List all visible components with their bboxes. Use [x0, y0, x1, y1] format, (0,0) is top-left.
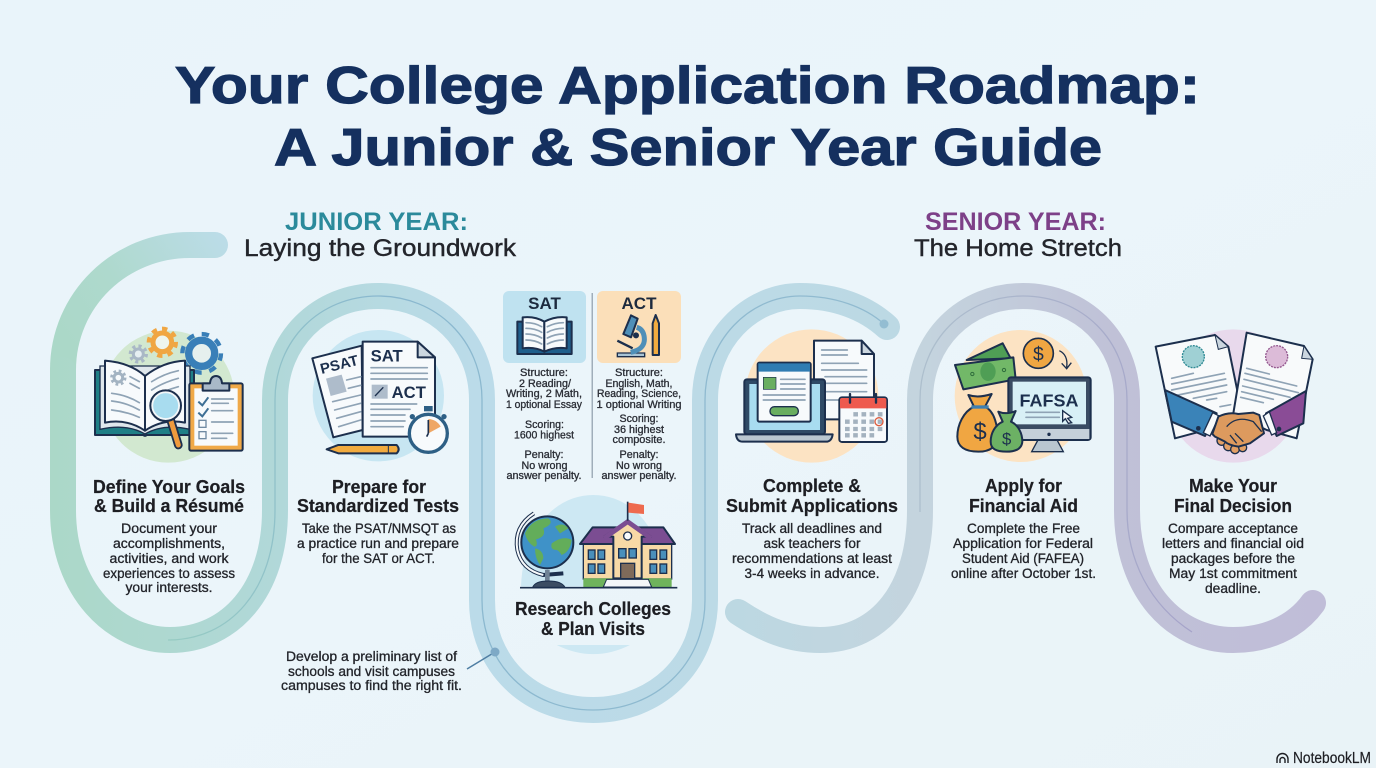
heading: complete and submit: Submit Applications: [726, 496, 898, 516]
text: complete body: [732, 521, 892, 581]
text: SAT facts: Penalty:: [524, 449, 564, 461]
icon: test papers, stopwatch and pencil: PSAT: [319, 353, 360, 378]
roadmap path: junior year: [63, 245, 888, 710]
icon: money, FAFSA monitor and bags: $: [973, 418, 987, 445]
text: ACT facts: Structure:: [615, 367, 663, 379]
heading: research colleges: [515, 599, 671, 639]
text: prepare body: a practice run and prepare: [297, 536, 459, 551]
text: final decision body: deadline.: [1205, 581, 1261, 596]
heading: apply for aid: [969, 476, 1078, 516]
text: SAT facts: Writing, 2 Math,: [506, 388, 582, 400]
text: ACT facts: answer penalty.: [602, 470, 676, 482]
callout: develop a preliminary list: campuses to find the right fit.: [281, 678, 462, 693]
text: final decision body: packages before the: [1171, 551, 1295, 566]
heading: complete and submit: [726, 476, 898, 516]
icon: acceptance letters and handshake: [1156, 329, 1313, 463]
text: SAT facts: No wrong: [522, 460, 568, 472]
icon: laptop, document and calendar: [736, 329, 887, 463]
card: SAT: SAT: [528, 294, 561, 313]
icon: money, FAFSA monitor and bags: FAFSA: [1019, 391, 1079, 411]
divider: [592, 293, 593, 478]
text: prepare body: [297, 521, 459, 566]
text: define goals body: experiences to assess: [103, 566, 235, 581]
callout: develop a preliminary list: [281, 648, 500, 693]
text: financial aid body: online after October 1st.: [951, 566, 1096, 581]
panel: financial aid: [951, 330, 1096, 581]
panel: final decision: [1156, 329, 1313, 596]
text: SAT facts: Structure:: [520, 367, 568, 379]
title: [175, 57, 1200, 177]
card: ACT: [597, 291, 681, 363]
text: define goals body: your interests.: [126, 580, 212, 595]
text: define goals body: activities, and work: [110, 551, 229, 566]
text: final decision body: Compare acceptance: [1168, 521, 1298, 536]
callout: develop a preliminary list: Develop a preliminary list of: [286, 649, 457, 664]
text: ACT facts: No wrong: [616, 460, 662, 472]
heading: complete and submit: Complete &: [763, 476, 861, 496]
roadmap path: senior year: [738, 296, 1313, 640]
heading: apply for aid: Apply for: [985, 476, 1062, 496]
text: final decision body: letters and financial oid: [1162, 536, 1304, 551]
card: ACT: ACT: [622, 294, 657, 313]
text: define goals body: [103, 521, 235, 595]
title: A Junior & Senior Year Guide: [274, 119, 1102, 177]
callout: develop a preliminary list: schools and visit campuses: [288, 664, 455, 679]
icon: test papers, stopwatch and pencil: ACT: [392, 383, 426, 402]
text: ACT facts: Penalty:: [620, 449, 658, 461]
panel: standardized tests: [297, 330, 459, 566]
icon: book, gears, magnifier and checklist: [95, 329, 243, 463]
heading: define your goals: & Build a Résumé: [94, 496, 244, 516]
card: SAT: [503, 291, 586, 363]
panel: research colleges: [515, 495, 677, 654]
text: SAT facts: 2 Reading/: [519, 378, 572, 390]
heading: junior year: Laying the Groundwork: [244, 235, 517, 262]
text: complete body: ask teachers for: [764, 536, 861, 551]
text: financial aid body: [951, 521, 1096, 581]
text: prepare body: for the SAT or ACT.: [322, 551, 435, 566]
icon: test papers, stopwatch and pencil: [312, 330, 447, 461]
text: final decision body: May 1st commitment: [1169, 566, 1297, 581]
panel: define goals: [93, 329, 245, 595]
icon: money, FAFSA monitor and bags: [955, 330, 1091, 462]
heading: research colleges: & Plan Visits: [541, 619, 645, 639]
text: financial aid body: Complete the Free: [967, 521, 1080, 536]
text: ACT facts: 1 optional Writing: [596, 399, 682, 411]
text: ACT facts: [596, 367, 682, 482]
panel: complete applications: [726, 329, 898, 581]
text: SAT facts: Scoring:: [525, 419, 564, 431]
text: final decision body: [1162, 521, 1304, 596]
text: SAT facts: 1 optional Essay: [506, 399, 582, 411]
text: ACT facts: composite.: [612, 434, 666, 446]
text: ACT facts: 36 highest: [614, 424, 665, 436]
icon: money, FAFSA monitor and bags: $: [1033, 344, 1044, 365]
heading: define your goals: [93, 477, 245, 516]
text: ACT facts: Scoring:: [620, 413, 658, 425]
heading: prepare for tests: [297, 477, 459, 516]
text: complete body: 3-4 weeks in advance.: [744, 566, 880, 581]
heading: prepare for tests: Standardized Tests: [297, 496, 459, 516]
text: define goals body: Document your: [121, 521, 218, 536]
text: define goals body: accomplishments,: [113, 536, 225, 551]
heading: research colleges: Research Colleges: [515, 599, 671, 619]
text: prepare body: Take the PSAT/NMSQT as: [302, 521, 456, 536]
heading: senior year: The Home Stretch: [914, 235, 1122, 262]
heading: junior year: JUNIOR YEAR:: [285, 208, 468, 236]
heading: junior year: [244, 208, 517, 262]
heading: senior year: SENIOR YEAR:: [925, 208, 1106, 236]
text: SAT facts: 1600 highest: [514, 430, 575, 442]
title: Your College Application Roadmap:: [175, 57, 1200, 115]
text: ACT facts: Reading, Science,: [597, 388, 681, 400]
text: financial aid body: Student Aid (FAFEA): [962, 551, 1084, 566]
text: SAT facts: answer penalty.: [506, 470, 582, 482]
icon: test papers, stopwatch and pencil: SAT: [371, 347, 403, 366]
text: complete body: Track all deadlines and: [742, 521, 882, 536]
heading: prepare for tests: Prepare for: [332, 477, 426, 497]
heading: make your decision: [1174, 476, 1292, 516]
heading: make your decision: Make Your: [1189, 476, 1277, 496]
text: financial aid body: Application for Federal: [953, 536, 1093, 551]
heading: define your goals: Define Your Goals: [93, 477, 245, 497]
panel: SAT versus ACT comparison: [503, 291, 682, 482]
text: SAT facts: [506, 367, 582, 482]
text: ACT facts: English, Math,: [606, 378, 672, 390]
icon: globe and campus building: [517, 495, 677, 654]
icon: money, FAFSA monitor and bags: $: [1002, 429, 1011, 448]
heading: make your decision: Final Decision: [1174, 496, 1292, 516]
heading: senior year: [914, 208, 1122, 262]
text: complete body: recommendations at least: [732, 551, 892, 566]
heading: apply for aid: Financial Aid: [969, 496, 1078, 516]
